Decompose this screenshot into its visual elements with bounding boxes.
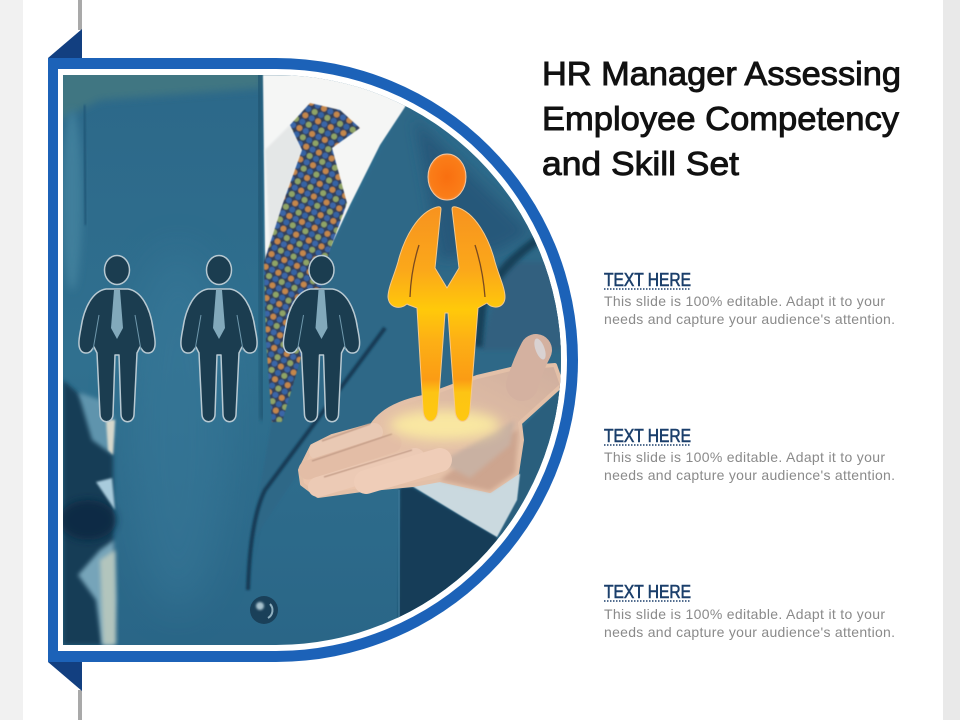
text block 1: needs and capture your audience's attention. [604, 311, 895, 327]
blue half-round frame [48, 58, 578, 662]
text block 1: TEXT HERE [604, 270, 691, 290]
title: HR Manager Assessing [542, 55, 901, 92]
lower jacket pocket shadow [397, 487, 498, 618]
title: and Skill Set [542, 145, 739, 182]
right jacket panel [248, 105, 565, 590]
text block 3 [604, 582, 895, 640]
shirt cuff [412, 474, 520, 537]
text block 2: needs and capture your audience's attention. [604, 467, 895, 483]
dark employee figure 1 [79, 256, 155, 422]
text block 2: This slide is 100% editable. Adapt it to your [604, 449, 885, 465]
title: Employee Competency [542, 100, 900, 137]
photo: businessman presenting employee figures [50, 60, 573, 645]
jacket button [250, 596, 278, 624]
dark employee figure 2 [181, 256, 257, 422]
text block 1 [604, 270, 895, 327]
sleeve and cuff at lower left [60, 380, 116, 645]
highlighted orange employee figure [388, 154, 505, 421]
ribbon fold: bottom [48, 662, 82, 720]
white inner frame [58, 69, 567, 651]
text block 3: TEXT HERE [604, 582, 691, 602]
right grey strip [943, 0, 960, 720]
left grey strip [0, 0, 23, 720]
open hand [300, 337, 562, 496]
text block 1: This slide is 100% editable. Adapt it to your [604, 293, 885, 309]
text block 3: needs and capture your audience's attention. [604, 624, 895, 640]
text block 3: This slide is 100% editable. Adapt it to your [604, 606, 885, 622]
patterned tie [264, 103, 360, 422]
text block 2: TEXT HERE [604, 426, 691, 446]
text block 2 [604, 426, 895, 483]
ribbon fold: top [48, 0, 82, 58]
dark employee figure 3 [283, 256, 360, 422]
suit jacket [50, 60, 573, 645]
title [542, 55, 901, 182]
shirt and collar [262, 75, 406, 260]
right sleeve [498, 390, 560, 536]
